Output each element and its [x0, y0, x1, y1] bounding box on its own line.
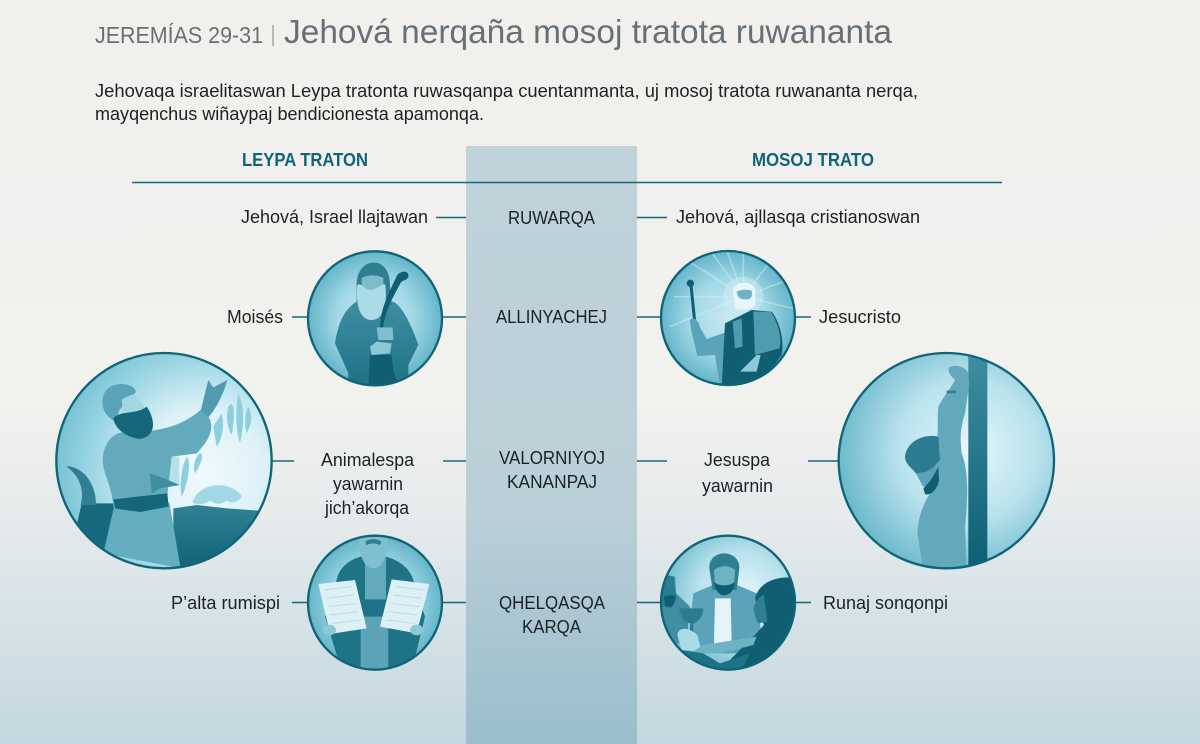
- row 2: allinyachej: [227, 307, 901, 327]
- row 2: allinyachej: Jesucristo: [819, 307, 901, 327]
- row 1: ruwarqa: [241, 207, 920, 228]
- intro text: mayqenchus wiñaypaj bendicionesta apamonqa.: [95, 104, 484, 124]
- row 3: valorniyoj kananpaj: KANANPAJ: [507, 472, 597, 492]
- row 3: valorniyoj kananpaj: [321, 448, 773, 518]
- row 4: qhelqasqa karqa: Runaj sonqonpi: [823, 593, 948, 613]
- icon: man offering sacrifice at altar fire: [56, 352, 273, 573]
- title: Jehová nerqaña mosoj tratota ruwananta: [284, 13, 893, 50]
- title: JEREMÍAS 29-31: [95, 22, 263, 48]
- row 3: valorniyoj kananpaj: jich’akorqa: [324, 498, 410, 518]
- row 3: valorniyoj kananpaj: yawarnin: [702, 476, 773, 496]
- row 3: valorniyoj kananpaj: Animalespa: [321, 450, 415, 470]
- row 3: valorniyoj kananpaj: yawarnin: [333, 474, 403, 494]
- row 1: ruwarqa: Jehová, ajllasqa cristianoswan: [676, 207, 920, 227]
- row 1: ruwarqa: Jehová, Israel llajtawan: [241, 207, 428, 227]
- center column band: [466, 146, 637, 744]
- intro text: Jehovaqa israelitaswan Leypa tratonta ruwasqanpa cuentanmanta, uj mosoj tratota ruwananta nerqa,: [95, 81, 918, 101]
- icon: Jesus at the Lord's Evening Meal: [653, 534, 800, 673]
- row 1: ruwarqa: RUWARQA: [508, 208, 595, 228]
- row 2: allinyachej: ALLINYACHEJ: [496, 307, 607, 327]
- icon: Moses holding stone tablets: [307, 534, 443, 672]
- intro text: [95, 81, 918, 124]
- row 4: qhelqasqa karqa: QHELQASQA: [499, 593, 605, 613]
- row 3: valorniyoj kananpaj: Jesuspa: [704, 450, 771, 470]
- row 4: qhelqasqa karqa: P’alta rumispi: [171, 593, 280, 613]
- icon: Jesus as high priest with staff: [660, 247, 800, 388]
- icon: Jesus on the stake: [838, 350, 1055, 570]
- icon: Moses with staff: [307, 250, 443, 387]
- row 4: qhelqasqa karqa: KARQA: [522, 617, 581, 637]
- row 2: allinyachej: Moisés: [227, 307, 283, 327]
- column heading: Leypa traton: LEYPA TRATON: [242, 150, 368, 170]
- column heading: Mosoj trato: MOSOJ TRATO: [752, 150, 874, 170]
- row 4: qhelqasqa karqa: [171, 593, 948, 637]
- row 3: valorniyoj kananpaj: VALORNIYOJ: [499, 448, 605, 468]
